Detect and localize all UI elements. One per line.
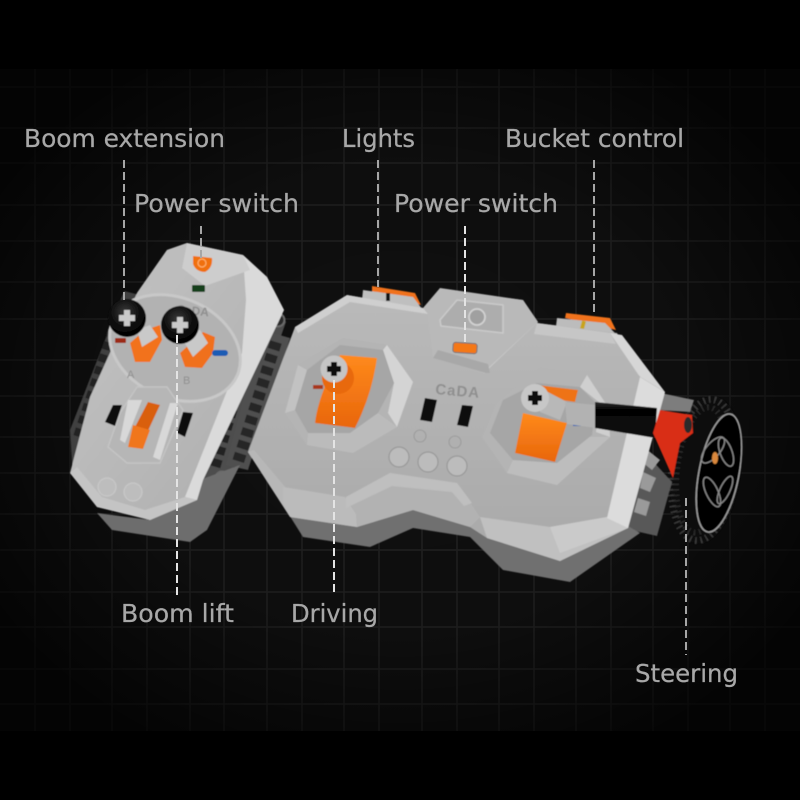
- black switches: [105, 405, 193, 437]
- wheel: [662, 392, 750, 548]
- main controller body: [248, 288, 665, 561]
- remote controllers illustration: [70, 243, 750, 582]
- small controller studs: [98, 478, 142, 501]
- bucket button: [556, 313, 617, 335]
- centre slider: [108, 387, 183, 463]
- status LED: [192, 285, 205, 292]
- port letter A: A: [127, 369, 135, 381]
- dashed line: lights: [377, 160, 379, 287]
- small controller body: [70, 243, 284, 520]
- steering connector behind wheel: [622, 392, 694, 536]
- dashed line: bucket control: [593, 160, 595, 315]
- label: Steering: Steering: [635, 659, 738, 688]
- joystick B: [161, 306, 228, 368]
- embossed brand: CaDA: [176, 302, 210, 319]
- label: Bucket control: Bucket control: [505, 124, 684, 153]
- port letter B: B: [183, 375, 190, 387]
- lights button: [362, 286, 423, 310]
- label: Power switch left: Power switch: [134, 189, 299, 218]
- main studs: [389, 447, 467, 476]
- right rails between controllers: [196, 309, 290, 492]
- power button: [193, 256, 212, 272]
- joystick A: [108, 299, 162, 362]
- label: Boom extension: Boom extension: [24, 124, 225, 153]
- main switches: [414, 398, 473, 448]
- left rail behind small controller: [70, 291, 140, 470]
- driving joystick recess: [285, 338, 413, 453]
- dashed line: boom extension: [123, 160, 125, 302]
- dashed line: left power switch: [200, 226, 202, 262]
- label: Lights: Lights: [342, 124, 415, 153]
- dashed line: boom lift: [176, 335, 178, 595]
- dashed line: right power switch: [464, 226, 466, 346]
- embossed logo: CaDA: [435, 381, 481, 402]
- label: Driving: Driving: [291, 599, 378, 628]
- circular joystick zone: [93, 275, 257, 421]
- small controller underside: [97, 465, 240, 542]
- label: Boom lift: Boom lift: [121, 599, 234, 628]
- bucket joystick recess: [482, 368, 610, 485]
- dashed line: steering: [685, 498, 687, 655]
- main controller underside: [286, 500, 640, 582]
- label: Power switch right: Power switch: [394, 189, 558, 218]
- steering lever and axle: [521, 384, 693, 478]
- centre panel: [427, 290, 538, 373]
- dashed line: driving: [333, 380, 335, 595]
